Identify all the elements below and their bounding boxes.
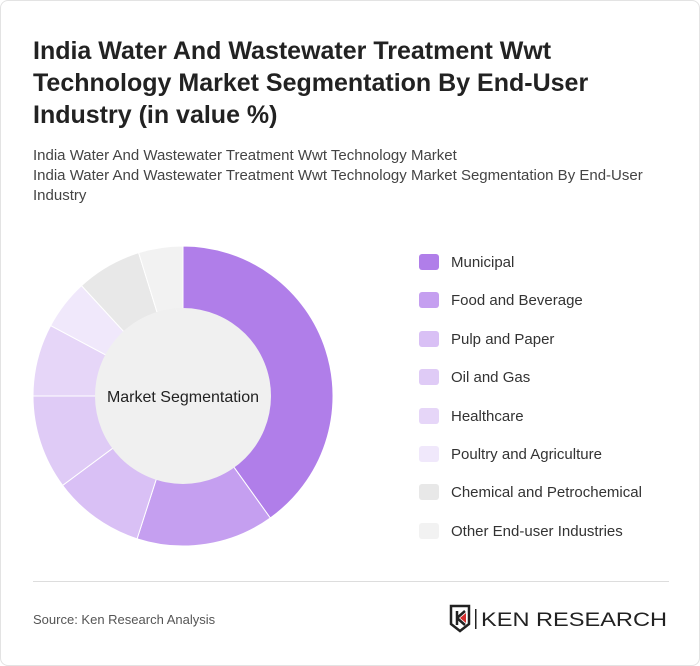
legend: Other End-user Industries (451, 523, 623, 540)
subtitle (33, 147, 643, 204)
title: India Water And Wastewater Treatment Wwt Technology Market Segmentation By End-User Industry (in value %) (33, 37, 588, 129)
legend: Poultry and Agriculture (451, 446, 602, 463)
logo (450, 604, 667, 633)
legend: Healthcare (451, 408, 524, 425)
subtitle: India Water And Wastewater Treatment Wwt Technology Market Segmentation By End-User Industry (33, 167, 643, 204)
source: Source: Ken Research Analysis (33, 612, 215, 627)
logo: KEN RESEARCH (481, 610, 667, 631)
legend: Chemical and Petrochemical (451, 484, 642, 501)
legend: Municipal (451, 254, 514, 271)
subtitle: India Water And Wastewater Treatment Wwt Technology Market (33, 147, 457, 164)
legend: Food and Beverage (451, 292, 583, 309)
legend (419, 254, 642, 540)
donut chart: Market Segmentation (107, 389, 259, 406)
donut chart (34, 246, 332, 546)
legend: Oil and Gas (451, 369, 530, 386)
legend: Pulp and Paper (451, 331, 554, 348)
